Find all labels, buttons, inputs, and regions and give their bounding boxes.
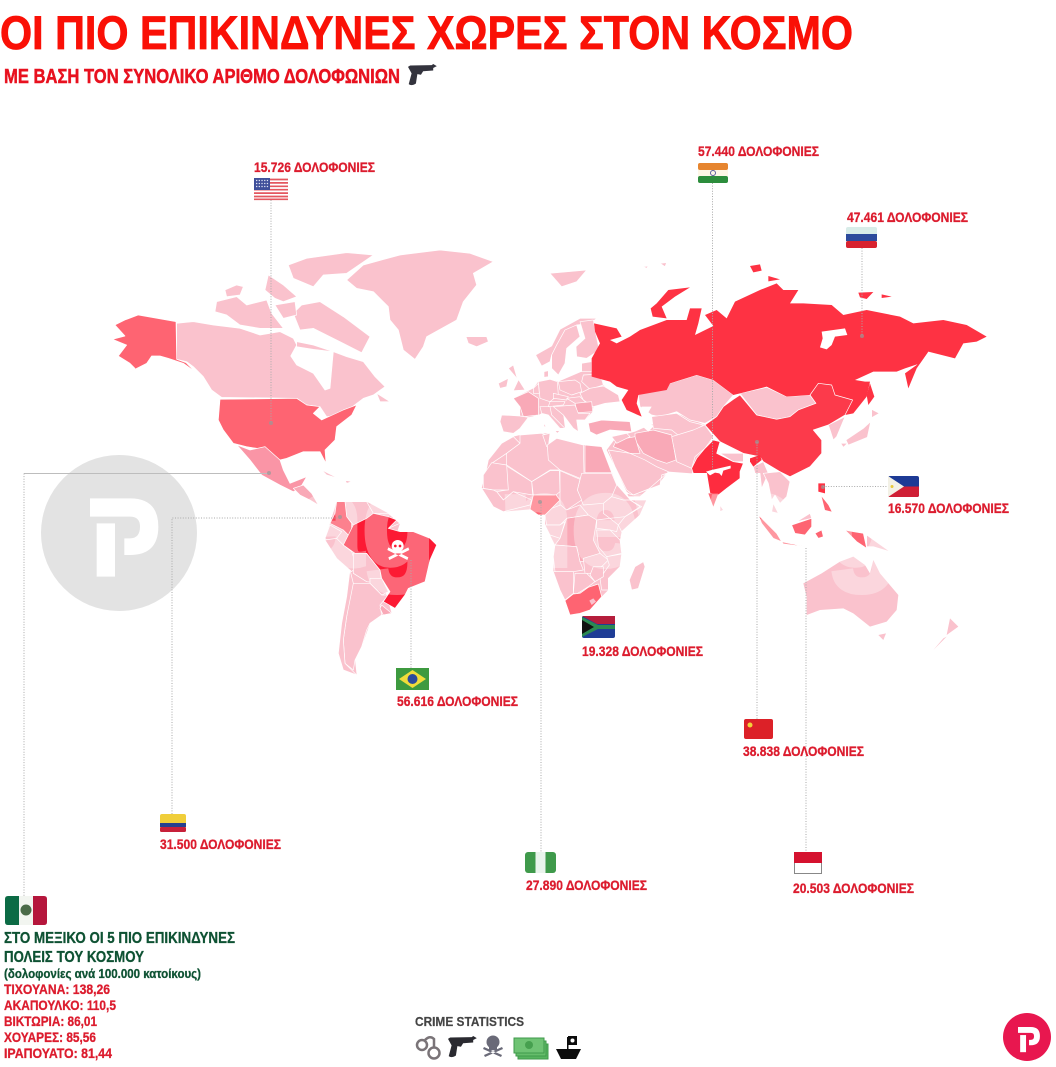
icon: pirate ship [556,1036,581,1059]
callout: china: 38.838 ΔΟΛΟΦΟΝΙΕΣ [743,743,864,759]
brazil [343,513,437,608]
central america and caribbean [293,470,352,505]
callout: indonesia: 20.503 ΔΟΛΟΦΟΝΙΕΣ [793,880,914,896]
callout: india [698,143,819,183]
usa [218,398,357,463]
icon: banknotes [514,1038,548,1059]
icon: skull and crossbones on brazil [387,540,409,560]
south asia neighbours [720,453,790,513]
flag: colombia [160,814,186,832]
callout: nigeria [525,852,647,893]
leader lines [24,183,888,896]
philippines [818,483,832,512]
russia [592,264,987,417]
europe [498,318,632,435]
nigeria [530,495,560,515]
flag: mexico [5,896,47,925]
city list [4,981,116,1061]
south america light countries [325,502,400,675]
heading [4,930,235,981]
flag: philippines [888,476,919,497]
africa [482,433,647,615]
icon: handcuffs [417,1037,440,1058]
greenland [347,250,493,359]
icon: skull and crossbones [483,1036,503,1057]
callout: brazil [396,668,518,709]
callout: south africa [582,616,703,659]
papua new guinea [867,535,890,552]
heading: ΣΤΟ ΜΕΞΙΚΟ ΟΙ 5 ΠΙΟ ΕΠΙΚΙΝΔΥΝΕΣ [4,930,235,947]
city list: ΑΚΑΠΟΥΛΚΟ: 110,5 [4,997,116,1013]
canada [177,322,385,417]
city list: ΒΙΚΤΩΡΙΑ: 86,01 [4,1013,97,1029]
city list: ΤΙΧΟΥΑΝΑ: 138,26 [4,981,110,997]
india [692,440,762,507]
canadian arctic islands [215,253,390,402]
flag: indonesia [794,852,822,874]
mongolia [740,387,816,419]
city list: ΧΟΥΑΡΕΣ: 85,56 [4,1029,96,1045]
colombia [330,502,352,538]
australia [803,557,898,627]
tasmania and new zealand [878,618,958,650]
callout: brazil: 56.616 ΔΟΛΟΦΟΝΙΕΣ [397,693,518,709]
icon: pistol on russia [820,328,847,349]
callout: india: 57.440 ΔΟΛΟΦΟΝΙΕΣ [698,143,819,159]
callout: nigeria: 27.890 ΔΟΛΟΦΟΝΙΕΣ [526,877,647,893]
south africa [565,584,602,615]
callout: china [743,719,864,759]
subtitle: ΜΕ ΒΑΣΗ ΤΟΝ ΣΥΝΟΛΙΚΟ ΑΡΙΘΜΟ ΔΟΛΟΦΩΝΙΩΝ [4,66,400,88]
flag: brazil [396,668,429,690]
callout: russia: 47.461 ΔΟΛΟΦΟΝΙΕΣ [847,209,968,225]
callout: colombia: 31.500 ΔΟΛΟΦΟΝΙΕΣ [160,836,281,852]
indonesia [758,513,867,548]
callout: usa [254,159,375,200]
callout: russia [846,209,968,248]
mexico [237,445,307,492]
heading: ΠΟΛΕΙΣ ΤΟΥ ΚΟΣΜΟΥ [4,949,144,966]
korea and japan [828,409,879,447]
south america silhouette [325,502,400,675]
flag: india [698,163,728,183]
flag: china [744,719,773,739]
flag: usa [254,178,288,200]
americas and arctic [113,250,493,675]
watermark logo disc [41,455,197,611]
legend: crime statistics [415,1014,581,1059]
alaska [113,315,195,378]
svalbard and arctic islands [550,263,667,287]
iceland [466,337,488,347]
callout: philippines [888,476,1009,516]
title: ΟΙ ΠΙΟ ΕΠΙΚΙΝΔΥΝΕΣ ΧΩΡΕΣ ΣΤΟΝ ΚΟΣΜΟ [0,7,853,60]
flag: russia [846,227,877,248]
watermark wordmark: pagenews.gr [225,450,945,593]
callout: philippines: 16.570 ΔΟΛΟΦΟΝΙΕΣ [888,500,1009,516]
world map [113,250,987,675]
callout: indonesia [793,852,914,896]
callout: south africa: 19.328 ΔΟΛΟΦΟΝΙΕΣ [582,643,703,659]
callout: colombia [160,814,281,852]
icon: pistol in subtitle [408,64,437,85]
central asia and middle east [607,375,733,497]
legend: crime statistics: CRIME STATISTICS [415,1014,524,1029]
city list: ΙΡΑΠΟΥΑΤΟ: 81,44 [4,1045,112,1061]
icon: pistol [448,1036,477,1057]
logo: pagenews badge [1003,1013,1051,1061]
icon: assault rifle on india [706,466,731,476]
callout: usa: 15.726 ΔΟΛΟΦΟΝΙΕΣ [254,159,375,175]
asia and oceania [550,263,987,650]
flag: nigeria [525,852,556,873]
china [705,383,853,477]
flag: south africa [582,616,615,638]
heading: (δολοφονίες ανά 100.000 κατοίκους) [4,966,201,981]
panel: mexico cities [4,896,235,1061]
